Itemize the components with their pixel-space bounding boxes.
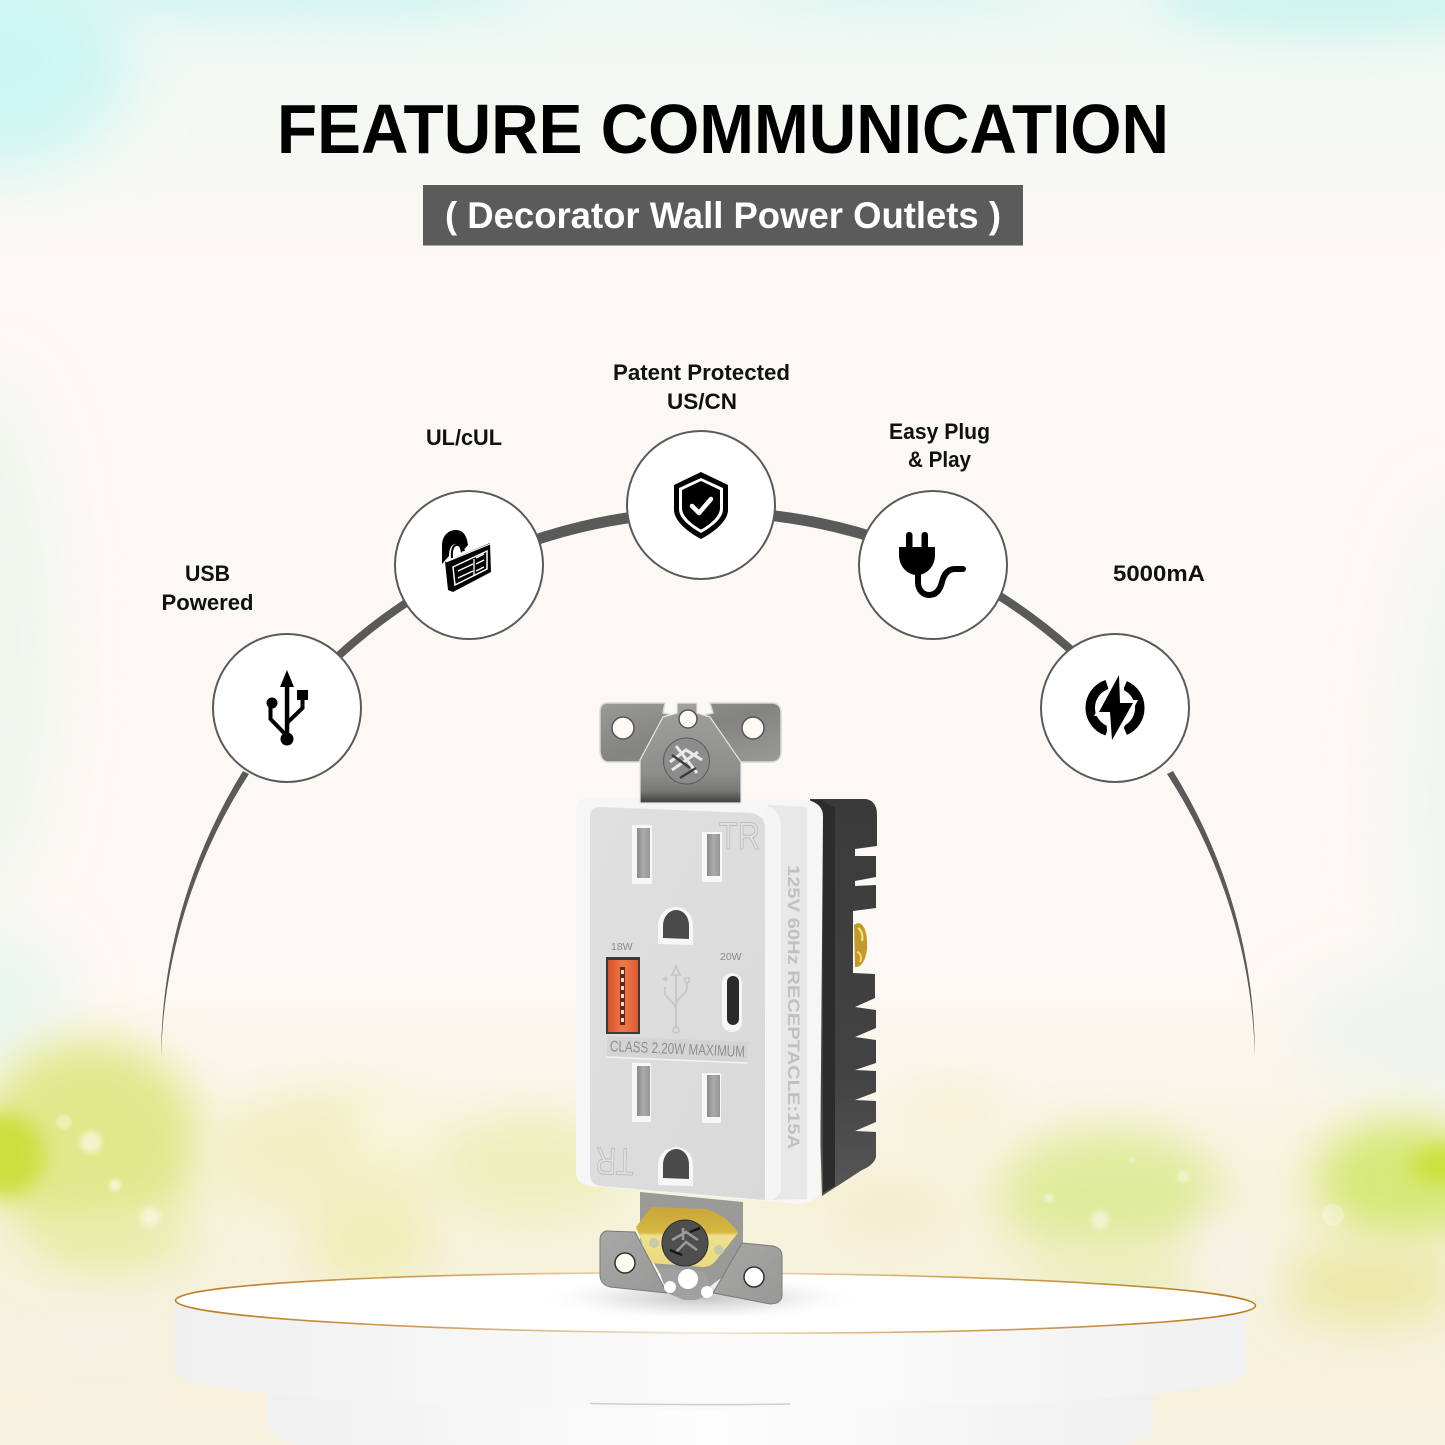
outlet grey face bbox=[590, 807, 765, 1200]
feature arc bbox=[161, 512, 1255, 1058]
USB-A port bbox=[606, 957, 640, 1034]
USB emboss symbol bbox=[663, 966, 690, 1033]
label: USB Powered: USB bbox=[185, 561, 230, 586]
title: FEATURE COMMUNICATION bbox=[277, 90, 1169, 168]
label: Easy Plug & Play: Easy Plug bbox=[889, 419, 990, 444]
feature: 5000mA bbox=[1041, 561, 1205, 782]
TR mark bottom: TR bbox=[595, 1139, 634, 1182]
icon: shield with check bbox=[674, 472, 728, 539]
circle: UL bbox=[395, 491, 543, 639]
class rating plate: CLASS 2.20W MAXIMUM bbox=[610, 1038, 745, 1061]
top mounting bracket bbox=[600, 703, 781, 803]
side strip bbox=[768, 805, 807, 1200]
subtitle banner: ( Decorator Wall Power Outlets ) bbox=[445, 195, 1001, 236]
circle: plug bbox=[859, 491, 1007, 639]
label: Easy Plug & Play: & Play bbox=[908, 447, 972, 472]
circle: USB bbox=[213, 634, 361, 782]
label: Patent Protected US/CN: US/CN bbox=[667, 389, 737, 414]
outlet white front shell bbox=[576, 798, 823, 1204]
TR mark top: TR bbox=[719, 816, 760, 858]
bottom sockets bbox=[632, 1063, 721, 1186]
feature: Patent Protected bbox=[613, 360, 790, 579]
podium top surface bbox=[175, 1270, 1256, 1336]
tier shadow bbox=[590, 1404, 790, 1405]
label: USB Powered: Powered bbox=[162, 590, 254, 615]
podium upper tier bbox=[175, 1302, 1246, 1409]
18W label: 18W bbox=[611, 941, 633, 953]
circle: 5000mA bbox=[1041, 634, 1189, 782]
product: wall outlet bbox=[576, 703, 877, 1304]
outlet black rear housing bbox=[810, 799, 877, 1196]
bottom mounting bracket bbox=[600, 1192, 782, 1304]
icon: certification badge bbox=[442, 530, 491, 592]
top sockets bbox=[632, 825, 722, 945]
USB-C port bbox=[722, 973, 742, 1032]
icon: USB symbol bbox=[266, 670, 308, 746]
light flares bbox=[57, 1100, 1344, 1229]
side rating text: 125V 60Hz RECEPTACLE:15A bbox=[784, 865, 802, 1149]
icon: plug and cord bbox=[899, 532, 963, 595]
podium bbox=[175, 1270, 1256, 1445]
20W label: 20W bbox=[720, 951, 742, 963]
circle: patent bbox=[627, 431, 775, 579]
label: 5000mA: 5000mA bbox=[1113, 561, 1205, 586]
feature: Easy Plug & Play bbox=[859, 419, 1007, 639]
icon: lightning bolt in ring bbox=[1090, 670, 1140, 745]
feature: USB Powered bbox=[162, 561, 361, 782]
label: UL/cUL: UL/cUL bbox=[426, 425, 502, 450]
podium lower tier bbox=[268, 1385, 1153, 1445]
label: Patent Protected US/CN: Patent Protected bbox=[613, 360, 790, 385]
product shadow bbox=[535, 1274, 865, 1322]
feature: UL/cUL bbox=[395, 425, 543, 639]
subtitle banner bbox=[423, 185, 1023, 246]
